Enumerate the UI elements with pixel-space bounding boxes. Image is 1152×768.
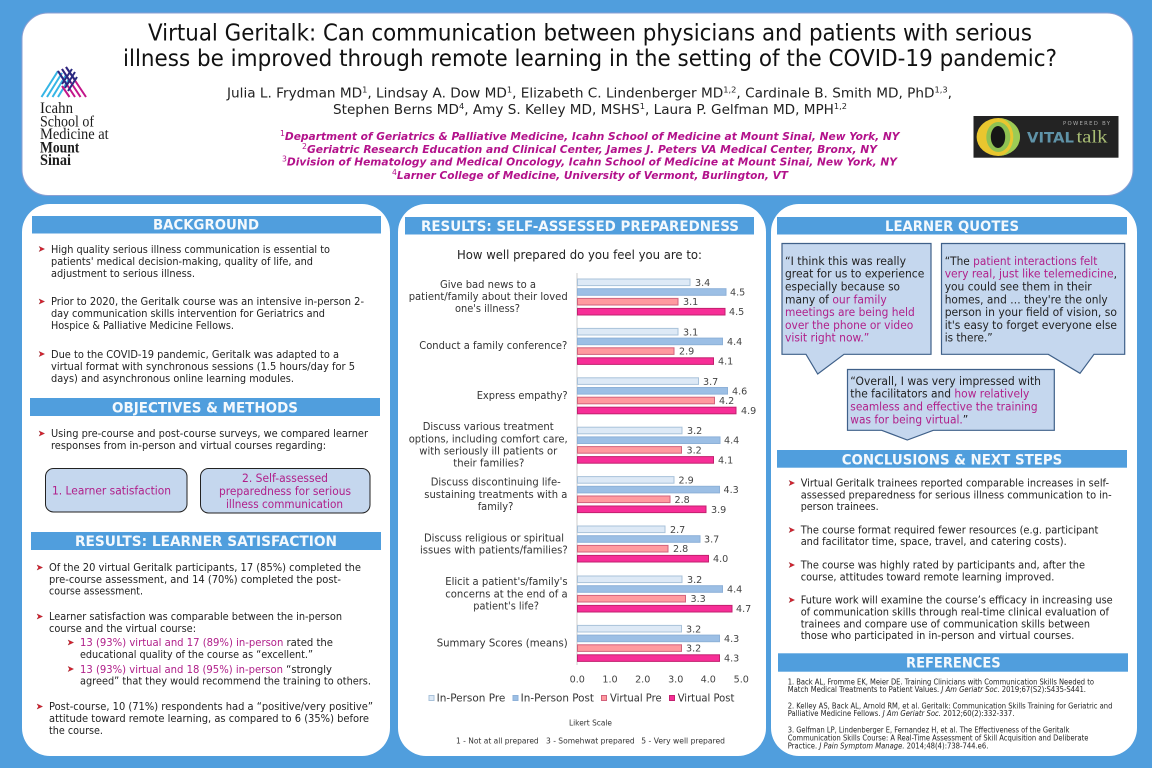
chart legend: In-Person Post (521, 694, 594, 704)
heading: conclusions and next steps (777, 450, 1127, 468)
callout: quote on patient interactions: homes, and … they're the only (945, 292, 1108, 306)
authors: 1 (362, 86, 367, 94)
callout: quote on family meetings: especially because so (785, 280, 900, 294)
text block: conclusions: Virtual Geritalk trainees reported comparable increases in self- (801, 477, 1109, 489)
chart group: empathy: Express empathy? (477, 391, 568, 402)
chart group: religious issues: 3.7 (704, 534, 719, 546)
chart group: religious issues: Discuss religious or spiritual (424, 533, 564, 544)
chart legend (429, 694, 734, 704)
x axis labels: 2.0 (635, 674, 650, 685)
chart group: bad news (409, 278, 745, 318)
chart group: treatment options: 4.4 (724, 436, 739, 447)
icon: Icahn School of Medicine at Mount Sinai logo: Medicine at (40, 126, 109, 143)
text block: satisfaction results: attitude toward remote learning, as compared to 6 (35%) before (49, 713, 369, 725)
text block: satisfaction results: Of the 20 virtual Geritalk participants, 17 (85%) completed the (49, 562, 361, 574)
chart group: empathy: 4.6 (732, 386, 747, 397)
callout: self-assessed preparedness: preparedness for serious (219, 484, 351, 498)
chart group: bad news: 3.4 (695, 278, 710, 289)
chart group: summary scores: 4.3 (724, 654, 739, 665)
chart group: bad news: one's illness? (455, 304, 520, 315)
chart group: summary scores: 4.3 (724, 634, 739, 645)
chart group: religious issues: 4.0 (713, 554, 728, 565)
authors: 1 (507, 86, 512, 94)
text block: references: Palliative Medicine Fellows. J Am Geriatr Soc. 2012;60(2):332-337. (788, 709, 1014, 718)
icon: VitalTalk logo: POWERED BY (1063, 121, 1111, 127)
text block: background bullets: days) and asynchronous online learning modules. (51, 373, 294, 385)
authors: Stephen Berns MD (333, 103, 455, 118)
icon: Icahn School of Medicine at Mount Sinai logo: Sinai (40, 152, 71, 169)
icon: Icahn School of Medicine at Mount Sinai logo: Mount (40, 139, 80, 156)
callout: quote on seamless training: was for being virtual.” (850, 412, 968, 426)
x axis labels: 1.0 (602, 674, 618, 685)
text block: references: 2. Kelley AS, Back AL, Arnold RM, et al. Geritalk: Communication Skills Training for Geriatric and (788, 701, 1113, 710)
text block: satisfaction results: the course. (49, 725, 103, 737)
icon: VitalTalk logo (974, 116, 1118, 158)
authors: , (948, 86, 952, 102)
chart group: life-sustaining treatments: 2.9 (678, 476, 694, 487)
x axis labels: 5.0 (734, 674, 749, 685)
callout: quote on seamless training: “Overall, I was very impressed with (850, 374, 1041, 388)
chart group: life-sustaining treatments: 2.8 (674, 495, 690, 506)
callout: quote on patient interactions: is there.” (945, 331, 993, 345)
chart group: bad news: 3.1 (683, 297, 698, 308)
text block: references: Practice. J Pain Symptom Manage. 2014;48(4):738-744.e6. (788, 741, 988, 750)
title: illness be improved through remote learning in the setting of the COVID-19 pandemic? (123, 46, 1057, 72)
text block: background bullets: Prior to 2020, the Geritalk course was an intensive in-person 2- (51, 296, 364, 308)
chart group: end of life concerns: 4.7 (736, 604, 751, 615)
affiliations: Division of Hematology and Medical Oncology, Icahn School of Medicine at Mount Sinai, New York, NY (287, 156, 898, 169)
authors: , Cardinale B. Smith MD, PhD (736, 86, 935, 102)
chart group: family conference: 2.9 (679, 347, 694, 358)
chart group: summary scores: Summary Scores (means) (437, 639, 568, 650)
heading: results learner satisfaction: RESULTS: LEARNER SATISFACTION (75, 534, 337, 550)
affiliations: 1 (280, 129, 285, 138)
scale key: 3 - Somehwat prepared (546, 737, 635, 746)
text block: conclusions: The course was highly rated by participants and, after the (800, 560, 1085, 572)
chart group: bad news: 4.5 (729, 307, 744, 318)
chart group: life-sustaining treatments: 4.3 (724, 485, 739, 496)
text block: conclusions: assessed preparedness for serious illness communication to in- (801, 489, 1112, 501)
text block: references (788, 677, 1113, 750)
authors: , Elizabeth C. Lindenberger MD (512, 86, 723, 102)
chart group: treatment options: their families? (453, 459, 524, 470)
x axis labels (570, 674, 749, 685)
callout: quote on patient interactions: it's easy to forget everyone else (945, 318, 1117, 332)
text block: background bullets: Hospice & Palliative Medicine Fellows. (51, 320, 234, 332)
chart group: life-sustaining treatments (424, 476, 739, 516)
text block: background bullets (39, 244, 364, 385)
authors: , Laura P. Gelfman MD, MPH (645, 103, 834, 118)
text block: background bullets: virtual format with synchronous sessions (1.5 hours/day for 5 (51, 361, 355, 373)
title (123, 20, 1057, 72)
callout: learner satisfaction (46, 468, 187, 512)
icon: Icahn School of Medicine at Mount Sinai logo: Icahn (40, 100, 73, 117)
scale key (456, 737, 725, 746)
chart group: summary scores: 3.2 (686, 644, 701, 655)
authors: 1,2 (723, 86, 736, 94)
scale key: 5 - Very well prepared (641, 737, 725, 746)
text block: conclusions: The course format required fewer resources (e.g. participant (800, 524, 1098, 536)
icon: VitalTalk logo: VITAL (1027, 130, 1074, 146)
callout: quote on family meetings: over the phone or video (785, 318, 913, 332)
icon: VitalTalk logo: talk (1076, 126, 1108, 146)
panel: right column (771, 204, 1137, 756)
text block: satisfaction results: agreed” that they would recommend the training to others. (80, 676, 371, 688)
panel: middle column (398, 204, 766, 756)
panel: left column (22, 204, 390, 756)
callout: self-assessed preparedness: illness communication (226, 497, 343, 511)
text block: background bullets: patients' medical decision-making, quality of life, and (51, 256, 313, 268)
heading: background: BACKGROUND (153, 218, 259, 234)
callout: quote on patient interactions: very real, just like telemedicine, (945, 267, 1117, 281)
chart group: end of life concerns: concerns at the end of a (445, 589, 568, 600)
title: Virtual Geritalk: Can communication between physicians and patients with serious (148, 20, 1032, 46)
callout: quote on patient interactions: person in your field of vision, so (945, 305, 1117, 319)
heading: background (32, 216, 381, 234)
affiliations: Geriatric Research Education and Clinical Center, James J. Peters VA Medical Center, Bronx, NY (307, 143, 878, 156)
heading: references (778, 653, 1128, 672)
callout: learner satisfaction: 1. Learner satisfaction (52, 484, 171, 498)
axis title: Likert scale: Likert Scale (569, 719, 612, 728)
text block: conclusions: trainees and compare use of communication skills between (801, 618, 1090, 630)
text block: satisfaction results: pre-course assessment, and 14 (70%) completed the post- (49, 574, 341, 586)
bar chart: preparedness (409, 273, 756, 704)
chart group: bad news: patient/family about their loved (409, 292, 568, 303)
heading: objectives and methods: OBJECTIVES & METHODS (112, 400, 298, 416)
authors: 1 (640, 102, 645, 111)
callout: quote on patient interactions: “The patient interactions felt (945, 254, 1098, 268)
chart group: end of life concerns: 3.2 (687, 575, 702, 586)
affiliations: 3 (282, 155, 287, 164)
callout: quote on family meetings: visit right now.” (785, 331, 869, 345)
chart group: family conference: Conduct a family conference? (419, 341, 567, 352)
chart group: religious issues: issues with patients/families? (420, 546, 568, 557)
text block: conclusions: course, attitudes toward remote learning improved. (801, 571, 1054, 583)
chart heading: How well prepared do you feel you are to: (457, 247, 702, 262)
text block: conclusions: of communication skills through real-time clinical evaluation of (801, 606, 1109, 618)
text block: background bullets: Due to the COVID-19 pandemic, Geritalk was adapted to a (51, 349, 339, 361)
callout: quote on family meetings: many of our family (785, 292, 887, 306)
chart group: end of life concerns: 3.3 (690, 594, 706, 605)
chart legend: Virtual Post (678, 694, 734, 704)
chart group: treatment options: 3.2 (686, 445, 702, 456)
x axis labels: 4.0 (701, 674, 716, 685)
chart group: treatment options: Discuss various treatment (423, 422, 554, 433)
chart group: family conference: 4.4 (727, 337, 742, 348)
affiliations: 2 (302, 142, 307, 151)
authors: Julia L. Frydman MD (227, 86, 358, 102)
callout: quote on family meetings: “I think this was really (785, 254, 906, 268)
text block: conclusions: and facilitator time, space, travel, and catering costs). (801, 536, 1067, 548)
heading: learner quotes: LEARNER QUOTES (885, 219, 1019, 235)
icon: Icahn School of Medicine at Mount Sinai logo (40, 67, 109, 169)
text block: methods (39, 428, 369, 452)
text block: references: Communication Skills Course: A Real-Time Assessment of Skill Acquisition and Deliberate (788, 733, 1089, 742)
chart group: summary scores: 3.2 (686, 624, 701, 635)
authors: , Amy S. Kelley MD, MSHS (464, 103, 640, 118)
text block: methods: Using pre-course and post-course surveys, we compared learner (51, 428, 369, 440)
heading: objectives and methods (30, 398, 380, 416)
chart group: treatment options: with seriously ill patients or (419, 447, 558, 458)
text block: satisfaction results: 13 (93%) virtual and 18 (95%) in-person “strongly (80, 664, 332, 676)
text block: satisfaction results: Post-course, 10 (71%) respondents had a “positive/very positive” (49, 701, 373, 713)
chart group: life-sustaining treatments: 3.9 (711, 505, 726, 516)
affiliations: Larner College of Medicine, University of Vermont, Burlington, VT (397, 169, 789, 182)
callout: self-assessed preparedness (200, 468, 370, 513)
affiliations (280, 129, 900, 182)
callout: quote on seamless training (848, 370, 1054, 440)
text block: conclusions: person trainees. (801, 501, 879, 513)
x axis labels: 0.0 (570, 674, 585, 685)
heading: conclusions and next steps: CONCLUSIONS & NEXT STEPS (842, 452, 1062, 468)
chart group: empathy: 3.7 (703, 377, 718, 388)
callout: quote on family meetings: great for us to experience (785, 267, 924, 281)
text block: satisfaction results: Learner satisfaction was comparable between the in-person (49, 611, 342, 623)
chart group: end of life concerns: 4.4 (727, 584, 742, 596)
icon: Icahn School of Medicine at Mount Sinai logo: School of (40, 113, 95, 130)
chart legend: In-Person Pre (437, 694, 505, 704)
text block: satisfaction results: 13 (93%) virtual and 17 (89%) in-person rated the (80, 637, 333, 649)
callout: quote on seamless training: seamless and effective the training (850, 400, 1038, 414)
chart group: family conference: 4.1 (718, 357, 733, 368)
chart group: bad news: Give bad news to a (440, 280, 536, 291)
chart group: end of life concerns: patient's life? (473, 601, 539, 612)
chart group: end of life concerns: Elicit a patient's/family's (445, 577, 568, 588)
text block: satisfaction results: course and the virtual course: (49, 623, 196, 635)
callout: self-assessed preparedness: 2. Self-assessed (242, 471, 328, 485)
chart group: life-sustaining treatments: Discuss discontinuing life- (431, 478, 561, 489)
authors: 1,2 (834, 102, 847, 111)
heading: references: REFERENCES (906, 655, 1001, 671)
text block: references: 3. Gelfman LP, Lindenberger E, Fernandez H, et al. The Effectiveness of the Geritalk (788, 725, 1070, 734)
text block: satisfaction results: course assessment. (49, 586, 143, 598)
authors: 1,3 (935, 86, 948, 94)
text block: background bullets: day communication skills intervention for Geriatrics and (51, 308, 325, 320)
text block: satisfaction results: educational quality of the course as “excellent.” (80, 649, 313, 661)
chart group: treatment options: 3.2 (687, 426, 702, 437)
callout: quote on family meetings: meetings are being held (785, 305, 915, 319)
authors: , Lindsay A. Dow MD (367, 86, 507, 102)
text block: conclusions: those who participated in in-person and virtual courses. (801, 630, 1074, 642)
chart group: empathy: 4.2 (719, 396, 734, 407)
chart group: religious issues: 2.8 (673, 544, 688, 555)
affiliations: Department of Geriatrics & Palliative Medicine, Icahn School of Medicine at Mount Sinai, New York, NY (285, 130, 900, 143)
chart group: religious issues (420, 525, 728, 565)
text block: references: 1. Back AL, Fromme EK, Meier DE. Training Clinicians with Communication Skills Needed to (788, 677, 1094, 686)
heading: results learner satisfaction (31, 532, 381, 550)
text block: background bullets: High quality serious illness communication is essential to (51, 244, 330, 256)
text block: conclusions: Future work will examine the course’s efficacy in increasing use (801, 595, 1113, 607)
chart legend: Virtual Pre (610, 694, 662, 704)
text block: references: Match Medical Treatments to Patient Values. J Am Geriatr Soc. 2019;67(S2):S435-S441. (788, 685, 1086, 694)
chart group: family conference: 3.1 (683, 327, 698, 338)
chart group: empathy: 4.9 (741, 406, 756, 417)
chart group: bad news: 4.5 (730, 288, 745, 298)
chart group: end of life concerns (445, 575, 751, 615)
chart group: summary scores (437, 624, 739, 665)
heading: results self-assessed preparedness: RESULTS: SELF-ASSESSED PREPAREDNESS (421, 219, 739, 235)
chart group: life-sustaining treatments: sustaining treatments with a (424, 490, 567, 501)
chart group: treatment options (409, 422, 739, 470)
panel: header (22, 13, 1133, 196)
scale key: 1 - Not at all prepared (456, 737, 539, 746)
heading: learner quotes (777, 217, 1127, 235)
callout: quote on patient interactions (942, 244, 1125, 373)
authors: 4 (459, 102, 464, 111)
chart group: family conference (419, 327, 742, 368)
callout: quote on seamless training: the facilitators and how relatively (850, 387, 1030, 401)
chart group: empathy (477, 377, 756, 417)
text block: conclusions (789, 477, 1113, 642)
callout: quote on family meetings (782, 244, 931, 374)
callout: quote on patient interactions: you could see them in their (945, 280, 1092, 294)
text block: methods: responses from in-person and virtual courses regarding: (51, 440, 326, 452)
authors (226, 86, 952, 118)
chart group: treatment options: options, including comfort care, (409, 434, 568, 445)
chart group: religious issues: 2.7 (670, 525, 685, 536)
chart group: treatment options: 4.1 (718, 455, 733, 466)
text block: background bullets: adjustment to serious illness. (51, 268, 195, 280)
text block: satisfaction results (37, 562, 373, 737)
affiliations: 4 (392, 168, 397, 177)
x axis labels: 3.0 (668, 674, 683, 685)
chart group: life-sustaining treatments: family? (478, 502, 513, 513)
